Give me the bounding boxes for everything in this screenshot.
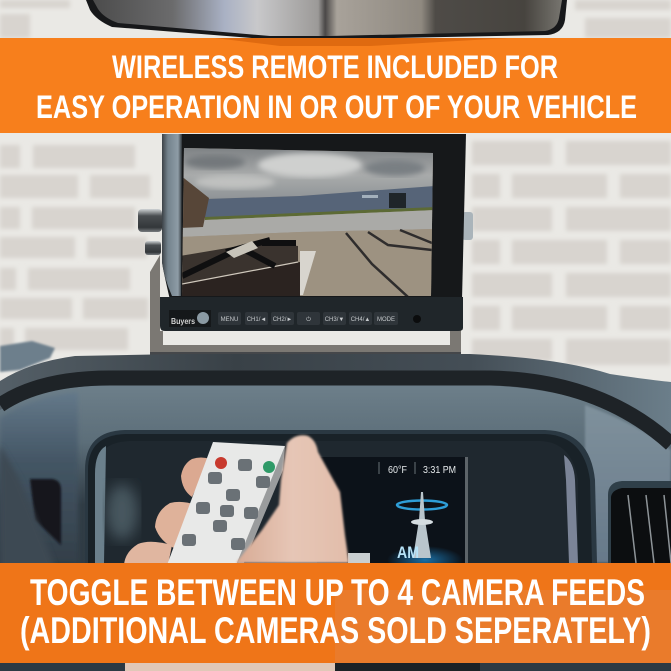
- monitor bracket: [150, 255, 461, 356]
- camera feed grass: [205, 207, 435, 220]
- banner: top: [0, 38, 671, 133]
- camera feed building: [205, 186, 435, 218]
- control buttons: CH3/▼: [325, 317, 344, 323]
- control buttons: MODE: [377, 317, 395, 323]
- fingers: [181, 458, 210, 497]
- control buttons: CH2/►: [273, 317, 292, 323]
- console highlight strips: [95, 446, 106, 563]
- rearview mirror: [86, 0, 567, 39]
- console soft glow: [106, 484, 138, 540]
- left vent: [30, 479, 61, 545]
- camera feed cracks: [346, 230, 432, 297]
- small white label: [348, 553, 370, 563]
- infotainment screen: [317, 457, 468, 574]
- radio tower icon: [397, 492, 447, 562]
- screen: camera feed: [180, 146, 435, 298]
- background: brick wall: [0, 0, 671, 400]
- monitor: [138, 134, 473, 356]
- remote buttons: [215, 457, 227, 469]
- camera feed sky: [180, 146, 435, 199]
- hand holding remote: [124, 435, 349, 565]
- control buttons: ⏻: [306, 316, 311, 323]
- left seat shadow: [0, 445, 58, 575]
- infotainment screen: 3:31 PM: [423, 465, 456, 476]
- camera feed road: [180, 210, 435, 237]
- remote control: [167, 442, 285, 565]
- monitor housing: [162, 134, 466, 300]
- logo: [169, 310, 211, 327]
- center console surround: [85, 430, 597, 563]
- thumb and palm: [236, 435, 349, 563]
- right panel: [585, 405, 671, 563]
- camera feed tow hitch: [180, 242, 298, 290]
- mounting knobs: [138, 209, 473, 255]
- object on left dash: [0, 341, 55, 372]
- bottom strip below banner: [0, 663, 671, 671]
- dashboard: [0, 354, 671, 671]
- control buttons: MENU: [221, 317, 238, 323]
- right vent: [608, 481, 671, 563]
- control buttons: CH4/▲: [351, 317, 370, 323]
- control buttons: [218, 312, 421, 325]
- logo: Buyers: [171, 317, 195, 326]
- left panel: [0, 392, 78, 563]
- status separators: [379, 462, 415, 474]
- dash light panel: [0, 385, 671, 671]
- banner: bottom: [0, 563, 671, 663]
- dark textured band: [0, 378, 671, 444]
- dash top surface: [0, 354, 671, 671]
- temperature and time: 60°F: [388, 465, 407, 476]
- control buttons: CH1/◄: [247, 317, 266, 323]
- top headline line 1: WIRELESS REMOTE INCLUDED FOR: [112, 49, 558, 85]
- AM label: AM: [397, 543, 419, 562]
